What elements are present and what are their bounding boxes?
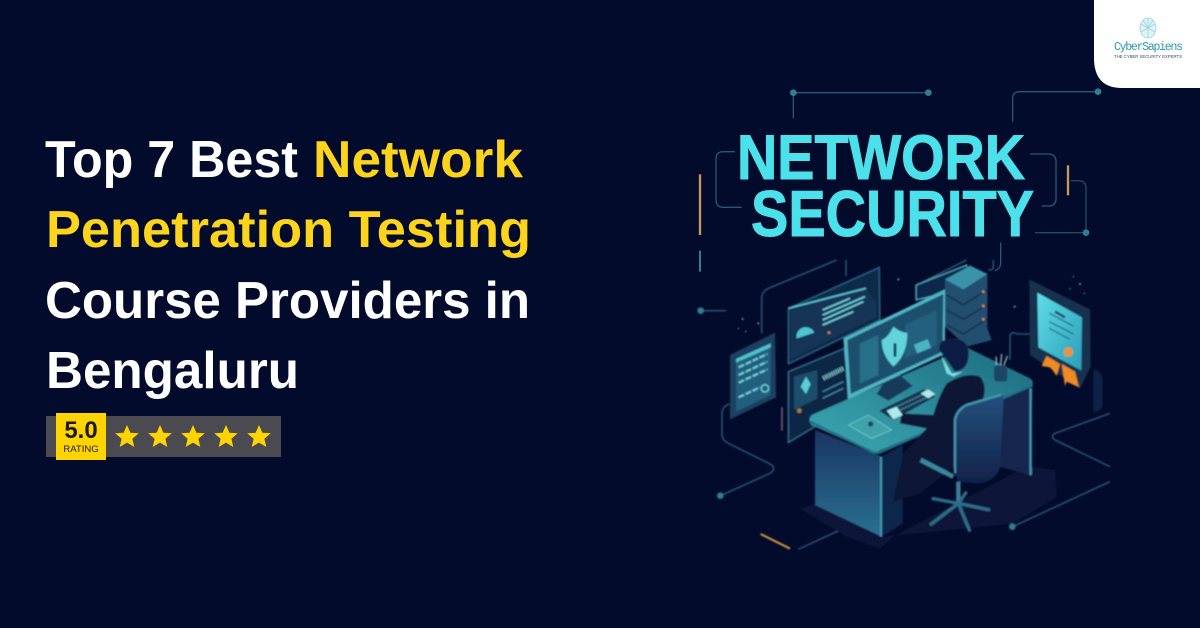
title heading: Top 7 Best (45, 131, 298, 189)
circuit lines above headline (700, 88, 1101, 272)
chair (921, 394, 1003, 532)
screen panel upper (788, 267, 880, 364)
network security headline (737, 123, 1034, 250)
network security headline: SECURITY (751, 177, 1034, 250)
title heading: Course Providers in (45, 272, 530, 330)
desk (809, 347, 1033, 537)
five stars (115, 425, 271, 447)
pencil cup (994, 365, 1007, 381)
illustration: analyst at desk (697, 260, 1110, 549)
icon: brain (1140, 18, 1156, 38)
circuit lines around desk (697, 260, 1110, 549)
network security headline: NETWORK (737, 123, 1025, 193)
tablet panel left (730, 333, 776, 419)
main monitor (843, 289, 945, 401)
title heading: Penetration Testing (46, 201, 531, 259)
title heading (45, 131, 531, 400)
keyboard (879, 389, 935, 420)
desk top (809, 347, 1033, 452)
person (887, 338, 985, 502)
notepad (848, 415, 892, 438)
rating badge: RATING (63, 444, 99, 455)
logo tab: CyberSapiens (1114, 41, 1183, 54)
floor shadow (800, 467, 1057, 548)
orange ribbon (1042, 356, 1060, 376)
screen panel lower (788, 347, 848, 443)
ambient dots (738, 276, 1085, 332)
logo tab: THE CYBER SECURITY EXPERTS (1114, 54, 1182, 59)
logo tab (1094, 0, 1200, 88)
title heading: Bengaluru (46, 342, 299, 400)
certificate (1029, 279, 1103, 412)
desk legs (815, 430, 882, 537)
title heading: Network (313, 131, 523, 189)
rating badge: 5.0 (64, 417, 98, 444)
server rack and back panel (916, 265, 992, 347)
rating badge (46, 413, 281, 460)
